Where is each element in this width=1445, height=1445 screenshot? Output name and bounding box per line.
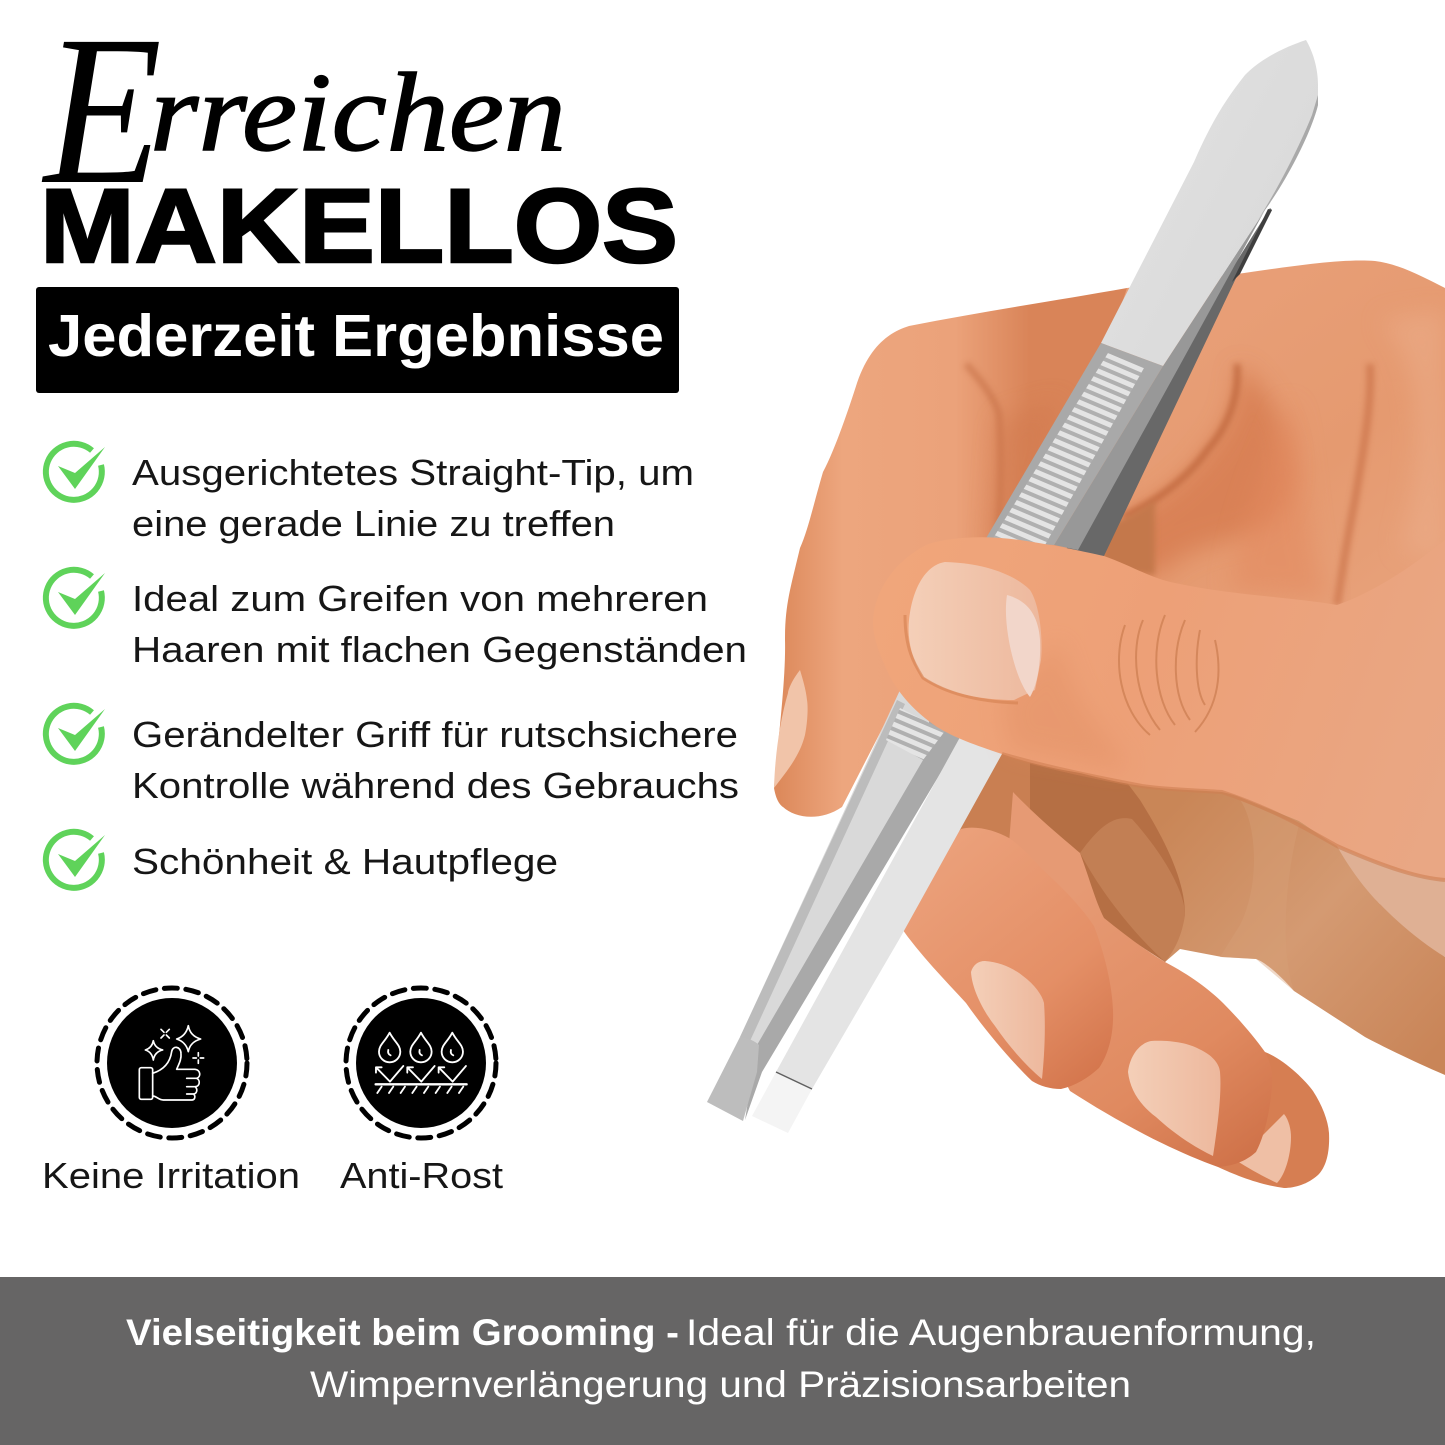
skin behind front arm	[945, 745, 1030, 860]
thumb lower fold	[1337, 846, 1445, 957]
subtitle banner: Jederzeit Ergebnisse	[48, 303, 664, 369]
feature text 1	[132, 452, 694, 544]
title: script word: rreichen	[150, 51, 566, 175]
label: Keine Irritation	[42, 1155, 300, 1196]
thumb knuckle wrinkles	[1119, 615, 1218, 735]
thumb nail	[909, 562, 1042, 700]
icon: water drops	[346, 988, 496, 1138]
photo: hand holding tweezers	[707, 40, 1445, 1188]
palm shadow creases	[1100, 310, 1445, 605]
icon: check 1	[46, 444, 105, 500]
tweezers upper blade	[1101, 40, 1318, 366]
icon: check 3	[46, 706, 105, 762]
title: MAKELLOS: MAKELLOS	[40, 168, 678, 285]
feature text 3	[132, 714, 739, 806]
little nail	[1237, 1114, 1291, 1183]
little finger	[1218, 1052, 1329, 1188]
feature text 3: Kontrolle während des Gebrauchs	[132, 765, 739, 806]
footer text line 1: Ideal für die Augenbrauenformung,	[686, 1312, 1316, 1353]
icon: check 4	[46, 832, 105, 888]
feature text 3: Gerändelter Griff für rutschsichere	[132, 714, 738, 755]
title: script word	[41, 0, 566, 229]
hand palm and wrist	[945, 260, 1445, 1075]
feature text 2	[132, 578, 747, 670]
footer text line 1: Vielseitigkeit beim Grooming -	[126, 1312, 679, 1353]
tweezers lower rear arm	[707, 690, 965, 1121]
middle nail	[971, 961, 1045, 1079]
tweezers rear arm upper	[1054, 208, 1272, 560]
index knuckle crease	[964, 362, 1025, 532]
feature text 2: Haaren mit flachen Gegenständen	[132, 629, 747, 670]
badge: Anti-Rost	[340, 988, 503, 1196]
footer text line 1	[126, 1312, 1316, 1353]
feature text 2: Ideal zum Greifen von mehreren	[132, 578, 708, 619]
tweezers	[707, 40, 1318, 1133]
tweezers lower front arm	[752, 705, 1020, 1133]
ring finger	[1000, 792, 1272, 1167]
index nail	[774, 670, 808, 788]
index finger	[774, 288, 1127, 817]
label: Anti-Rost	[340, 1155, 503, 1196]
tweezers ribbed grip	[985, 343, 1163, 545]
under palm	[1080, 780, 1445, 1075]
footer text line 2: Wimpernverlängerung und Präzisionsarbeiten	[310, 1364, 1131, 1405]
curled knuckles	[1005, 755, 1185, 962]
footer band	[0, 1277, 1445, 1445]
icon: thumbs up	[97, 988, 247, 1138]
badge: Keine Irritation	[42, 988, 300, 1196]
feature list	[46, 444, 747, 888]
icon: check 2	[46, 570, 105, 626]
feature text 1: eine gerade Linie zu treffen	[132, 503, 615, 544]
thumb	[873, 537, 1445, 957]
thumb upper shade	[1000, 640, 1130, 770]
feature text 4: Schönheit & Hautpflege	[132, 841, 558, 882]
subtitle banner	[36, 287, 679, 393]
ring nail	[1128, 1041, 1220, 1156]
feature text 1: Ausgerichtetes Straight-Tip, um	[132, 452, 694, 493]
middle finger	[900, 828, 1113, 1089]
